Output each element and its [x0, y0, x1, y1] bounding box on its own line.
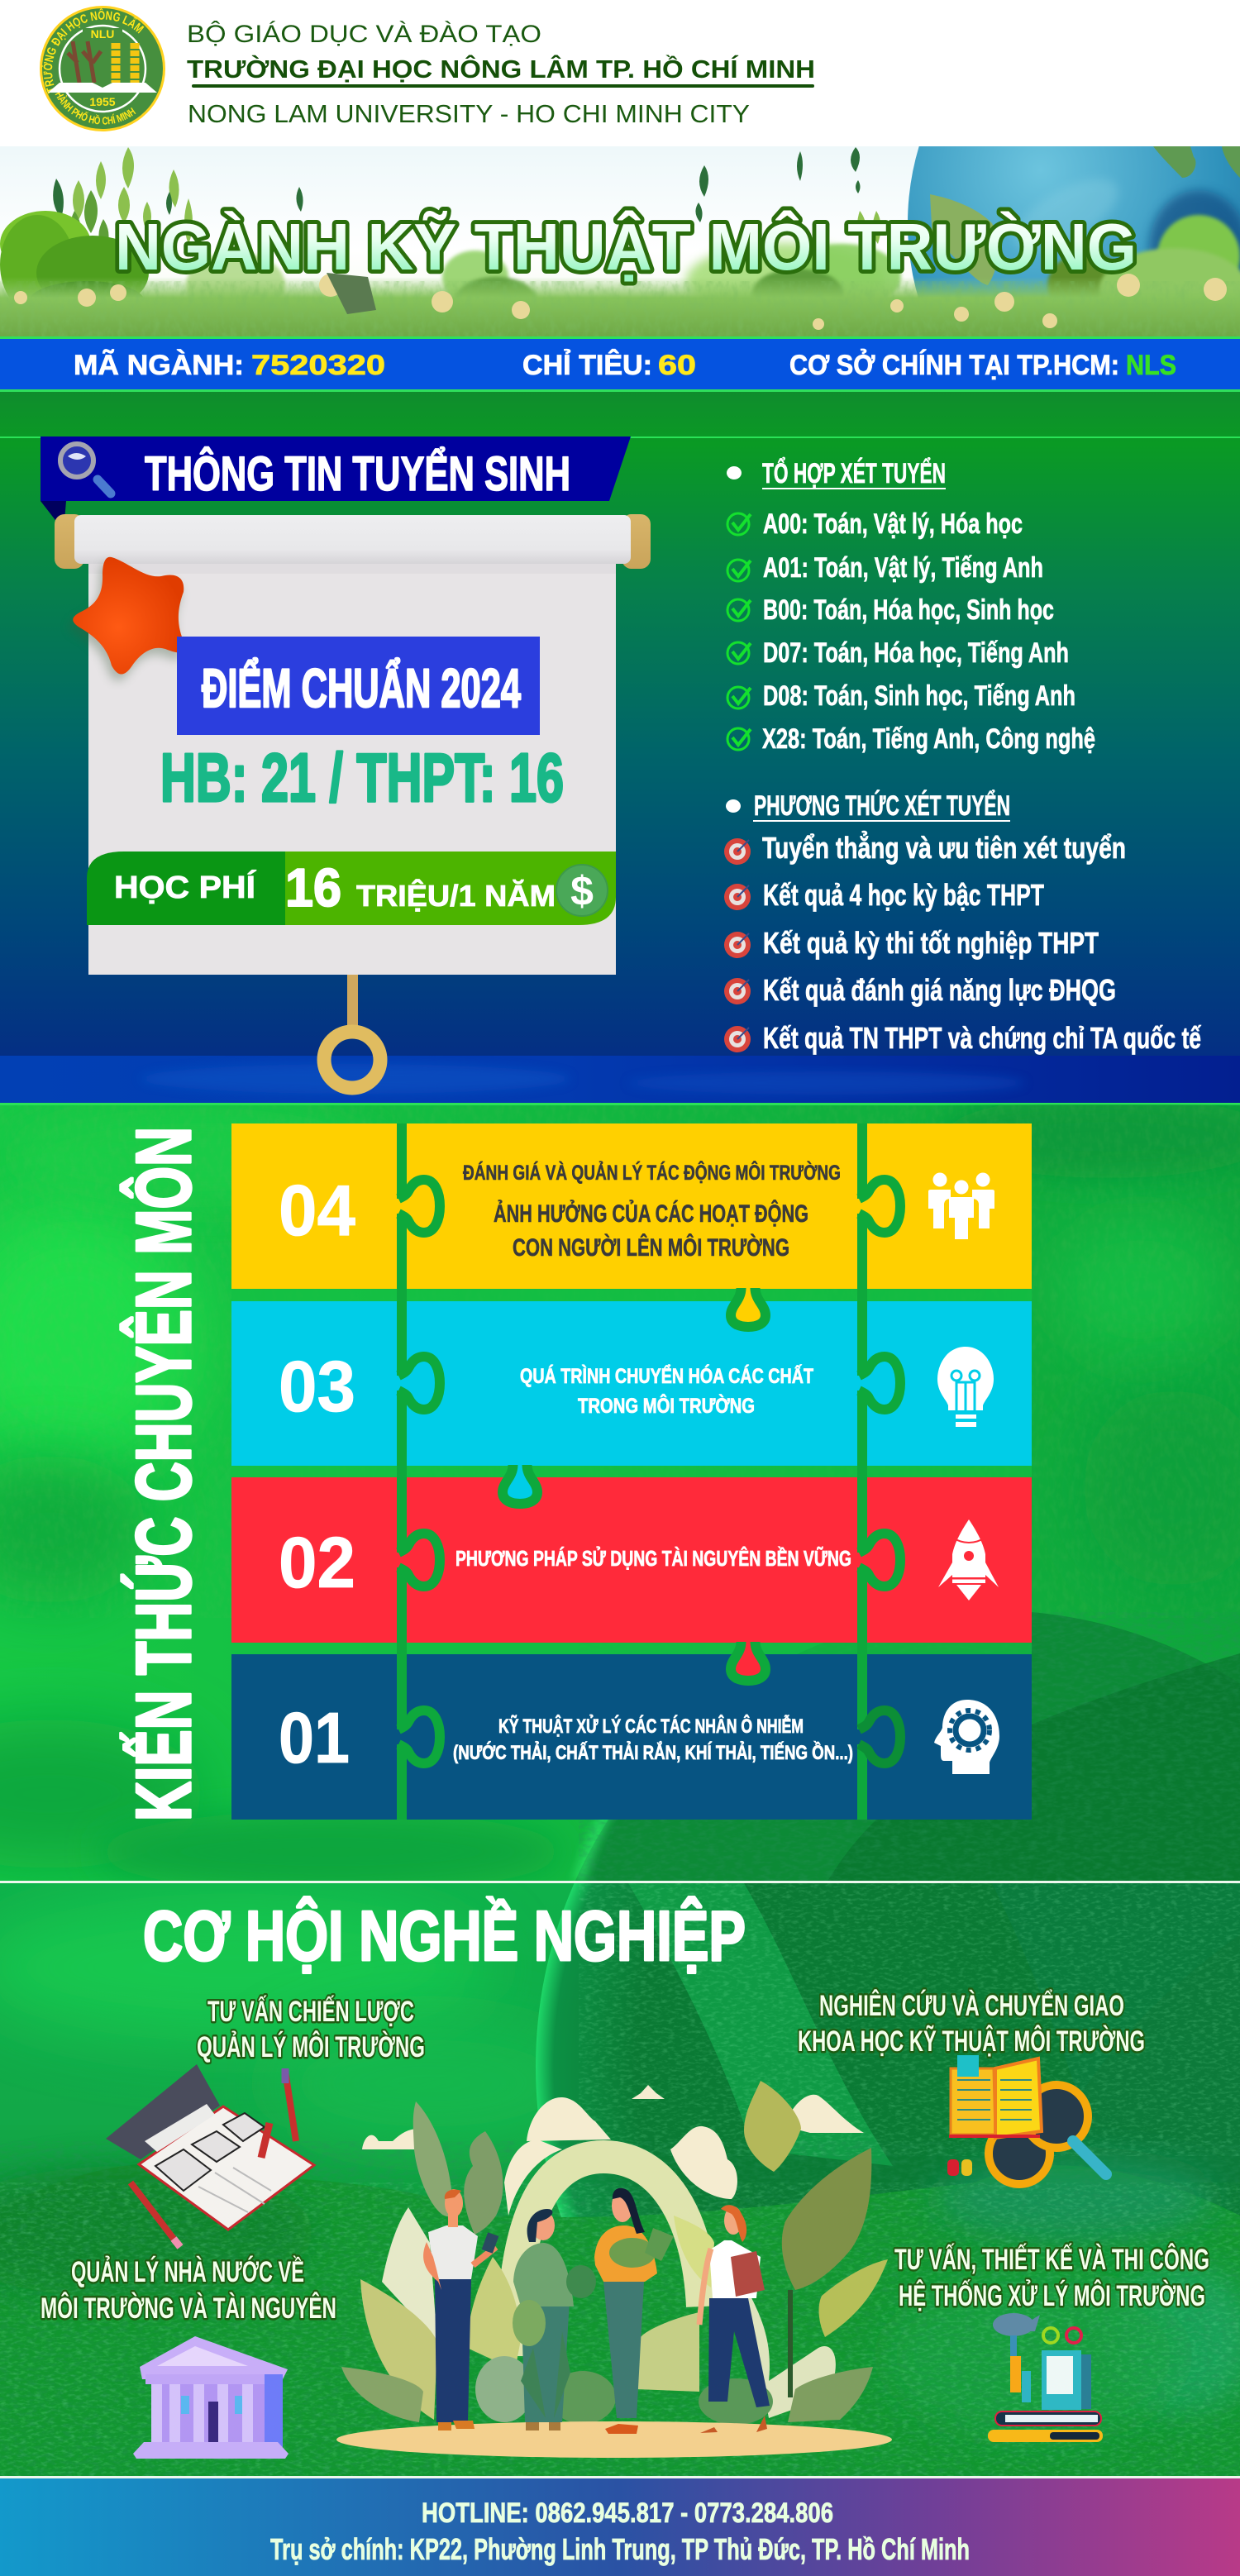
- illustration: people among plants: [336, 2081, 892, 2458]
- icon: dollar coin: $: [570, 868, 594, 914]
- paper sheet: [88, 562, 616, 975]
- item: transcript: Kết quả 4 học kỳ bậc THPT: [763, 878, 1044, 912]
- item: transcript: [724, 878, 1044, 912]
- text: quota: CHỈ TIÊU:: [522, 350, 652, 381]
- tuition bar: HỌC PHÍ: [114, 869, 257, 905]
- panel: scroll board: [55, 514, 651, 1088]
- text: major code: [74, 350, 385, 381]
- puzzle row 03: [231, 1301, 1032, 1466]
- clouds: [362, 2085, 864, 2216]
- text: university name: TRƯỜNG ĐẠI HỌC NÔNG LÂM TP. HỒ CHÍ MINH: [187, 54, 815, 83]
- label: strategic consulting: [197, 1995, 425, 2063]
- person: man with tablet: [423, 2189, 498, 2431]
- label: research and transfer: [798, 1989, 1145, 2058]
- puzzle row 01: [231, 1654, 1032, 1820]
- text: address: Trụ sở chính: KP22, Phường Linh Trung, TP Thủ Đức, TP. Hồ Chí Minh: [270, 2532, 970, 2566]
- item: competency test: Kết quả đánh giá năng lực ĐHQG: [763, 973, 1116, 1007]
- icon: gear and books: [988, 2313, 1103, 2442]
- item: A00: [727, 508, 1023, 540]
- label: design and construction: [894, 2243, 1209, 2312]
- item: X28: [727, 723, 1095, 755]
- text: impact assessment: ẢNH HƯỞNG CỦA CÁC HOẠT ĐỘNG: [494, 1200, 808, 1228]
- number 04: 04: [279, 1171, 355, 1251]
- item: graduation exam: Kết quả kỳ thi tốt nghiệp THPT: [763, 926, 1099, 960]
- panel: specialist knowledge: [0, 1104, 1240, 1883]
- item: competency test: [724, 973, 1116, 1007]
- benchmark score box: ĐIỂM CHUẨN 2024: [202, 657, 521, 718]
- heading: subject combinations: [727, 458, 946, 489]
- panel: admission information: [0, 392, 1240, 1105]
- item: X28: X28: Toán, Tiếng Anh, Công nghệ: [762, 723, 1095, 755]
- text: campus: CƠ SỞ CHÍNH TẠI TP.HCM:: [789, 350, 1119, 381]
- heading: career opportunities: CƠ HỘI NGHỀ NGHIỆP: [143, 1896, 746, 1976]
- text: english name: NONG LAM UNIVERSITY - HO CHI MINH CITY: [188, 99, 750, 128]
- item: D08: [727, 680, 1075, 712]
- puzzle row 02: [231, 1477, 1032, 1643]
- footer: contact bar: [0, 2478, 1240, 2576]
- text: ministry name: BỘ GIÁO DỤC VÀ ĐÀO TẠO: [187, 20, 541, 48]
- text: impact assessment: ĐÁNH GIÁ VÀ QUẢN LÝ TÁC ĐỘNG MÔI TRƯỜNG: [463, 1160, 841, 1185]
- icon: book and magnifiers: [947, 2055, 1106, 2184]
- tuition bar: TRIỆU/1 NĂM: [356, 878, 556, 913]
- number 03: 03: [279, 1347, 355, 1427]
- info bar: code, quota, campus: [0, 336, 1240, 392]
- text: pollutant treatment: KỸ THUẬT XỬ LÝ CÁC TÁC NHÂN Ô NHIỄM: [498, 1714, 804, 1738]
- heading: subject combinations: TỔ HỢP XÉT TUYỂN: [762, 458, 946, 489]
- puzzle row 04: [231, 1123, 1032, 1289]
- banner ribbon: admissions heading: [41, 436, 631, 531]
- scattered leaves: [73, 147, 881, 245]
- text: major code: 7520320: [251, 350, 385, 381]
- text: substance transformation: TRONG MÔI TRƯỜNG: [578, 1393, 755, 1418]
- text: quota: 60: [658, 350, 696, 381]
- text: hotline: HOTLINE: 0862.945.817 - 0773.284.806: [422, 2497, 833, 2529]
- flowers: [14, 274, 1227, 330]
- icon: university logo: NLU: [91, 27, 114, 41]
- icon: orange star: [69, 557, 186, 681]
- label: state management: QUẢN LÝ NHÀ NƯỚC VỀ: [71, 2255, 304, 2288]
- arch: [513, 2157, 703, 2356]
- number 01: 01: [279, 1698, 350, 1778]
- item: A00: A00: Toán, Vật lý, Hóa học: [763, 508, 1023, 540]
- text: pollutant treatment: (NƯỚC THẢI, CHẤT THẢI RẮN, KHÍ THẢI, TIẾNG ỒN...): [453, 1740, 853, 1764]
- icon: rocket: [938, 1519, 999, 1600]
- text: pollutant treatment: [453, 1714, 853, 1764]
- text: impact assessment: CON NGƯỜI LÊN MÔI TRƯỜNG: [513, 1233, 789, 1262]
- background leaves: [341, 2081, 888, 2425]
- panel: career opportunities: [0, 1883, 1240, 2478]
- ground ellipse: [336, 2421, 892, 2458]
- bushes: [0, 211, 89, 251]
- heading: admissions information: THÔNG TIN TUYỂN SINH: [145, 447, 570, 501]
- label: state management: MÔI TRƯỜNG VÀ TÀI NGUYÊN: [41, 2292, 336, 2325]
- icon: magnifying glass: [60, 444, 111, 494]
- item: D07: [727, 637, 1069, 669]
- item: A01: A01: Toán, Vật lý, Tiếng Anh: [763, 552, 1043, 584]
- person: woman with folder: [699, 2205, 770, 2433]
- label: state management: [41, 2255, 336, 2325]
- label: strategic consulting: QUẢN LÝ MÔI TRƯỜNG: [197, 2030, 425, 2063]
- item: D08: D08: Toán, Sinh học, Tiếng Anh: [763, 680, 1075, 712]
- title: NGÀNH KỸ THUẬT MÔI TRƯỜNG: [115, 210, 1137, 284]
- puzzle connectors: [503, 1288, 765, 1681]
- icon: light bulb: [937, 1347, 994, 1427]
- icon: university logo: TRƯỜNG ĐẠI HỌC NÔNG LÂM: [41, 8, 144, 94]
- number 02: 02: [279, 1523, 355, 1603]
- item: direct admission: Tuyển thẳng và ưu tiên xét tuyển: [762, 830, 1126, 865]
- text: scores: HB: 21 / THPT: 16: [160, 739, 564, 816]
- puzzle infographic: [231, 1123, 1032, 1820]
- tuition bar: [87, 852, 616, 925]
- list: admission methods: [724, 790, 1202, 1055]
- heading: admission methods: PHƯƠNG THỨC XÉT TUYỂN: [754, 790, 1010, 822]
- item: B00: B00: Toán, Hóa học, Sinh học: [763, 594, 1054, 626]
- item: A01: [727, 552, 1043, 584]
- item: B00: [727, 594, 1054, 626]
- text: campus: NLS: [1126, 350, 1176, 381]
- heading: admission methods: [726, 790, 1010, 822]
- text: major code: MÃ NGÀNH:: [74, 350, 244, 381]
- list: subject combinations: [727, 458, 1095, 755]
- text: substance transformation: [520, 1363, 813, 1418]
- heading: specialist knowledge vertical: KIẾN THỨC CHUYÊN MÔN: [120, 1127, 207, 1821]
- label: strategic consulting: TƯ VẤN CHIẾN LƯỢC: [207, 1995, 414, 2028]
- icon: university logo: 1955: [89, 95, 116, 108]
- icon: people: [928, 1172, 994, 1239]
- icon: university logo: THÀNH PHỐ HỒ CHÍ MINH: [55, 93, 136, 125]
- banner: nature scene with title: [0, 146, 1240, 336]
- pull cord and ring: [324, 975, 380, 1088]
- icon: head with gear: [934, 1700, 999, 1774]
- header: university identity: [0, 0, 1240, 146]
- person: woman in orange: [594, 2188, 674, 2434]
- benchmark score box: [177, 637, 540, 735]
- person: woman in green: [513, 2209, 596, 2431]
- text: impact assessment: [463, 1160, 841, 1262]
- text: substance transformation: QUÁ TRÌNH CHUYỂN HÓA CÁC CHẤT: [520, 1363, 813, 1388]
- icon: university logo: [40, 6, 165, 131]
- item: D07: D07: Toán, Hóa học, Tiếng Anh: [763, 637, 1069, 669]
- text: sustainable resources: PHƯƠNG PHÁP SỬ DỤNG TÀI NGUYÊN BỀN VỮNG: [455, 1545, 851, 1571]
- icon: notebook and pencils: [106, 2064, 314, 2247]
- icon: government building: [133, 2336, 289, 2459]
- tuition bar: 16: [285, 857, 341, 918]
- icon: dollar coin: [556, 865, 608, 916]
